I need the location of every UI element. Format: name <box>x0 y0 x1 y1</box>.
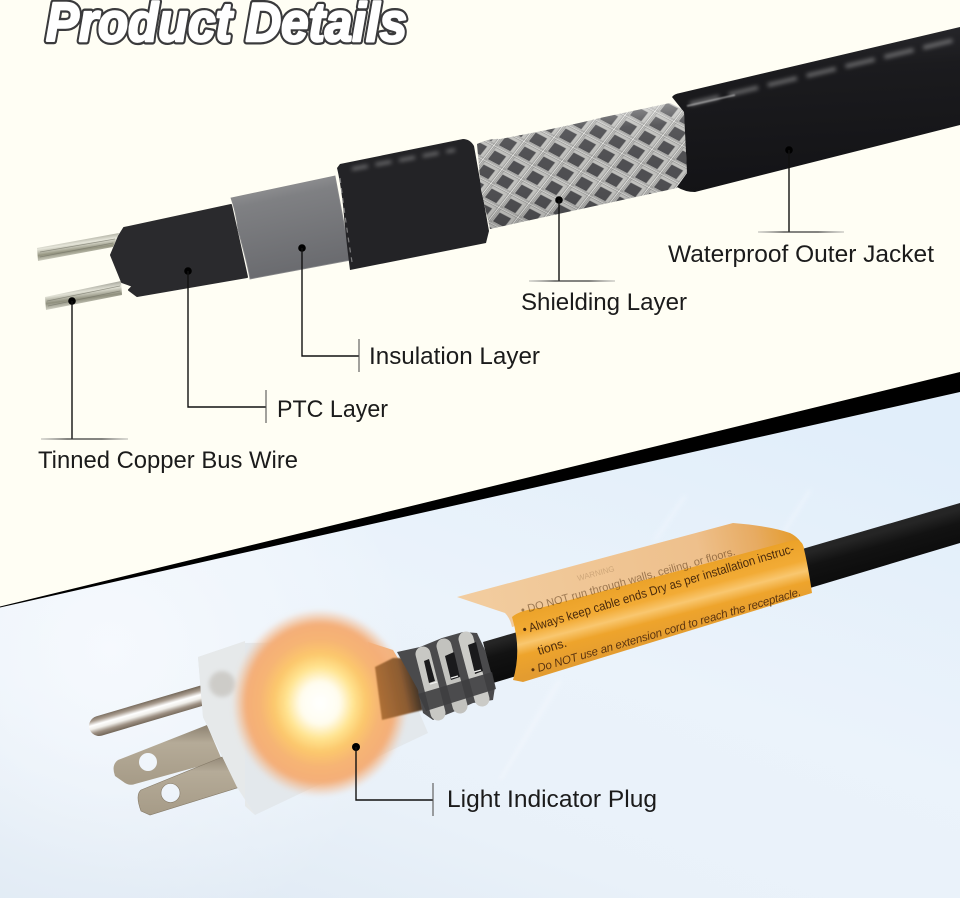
PTC layer core <box>111 205 247 296</box>
tag printed text: WARNING <box>576 564 616 583</box>
heating cable cutaway <box>37 27 960 310</box>
orange glow <box>232 609 408 797</box>
lower flat blade <box>138 753 240 815</box>
ground pin <box>99 692 214 726</box>
insulation layer <box>231 176 351 279</box>
inner jacket section <box>337 139 489 270</box>
tag printed text: • Always keep cable ends Dry as per installation instruc- <box>521 542 796 637</box>
label: PTC layer <box>184 267 388 423</box>
label: waterproof outer jacket <box>668 146 934 268</box>
power cable <box>483 503 960 683</box>
label: insulation layer: Insulation Layer <box>369 343 540 370</box>
warning tag <box>457 523 812 682</box>
lighted plug <box>99 609 496 815</box>
label: light indicator plug: Light Indicator Plug <box>447 786 657 813</box>
tinned copper wires <box>37 233 122 310</box>
peeled tag flap <box>457 523 804 627</box>
label: shielding layer: Shielding Layer <box>521 289 687 316</box>
label: tinned copper bus wire <box>38 297 298 474</box>
tag printed text: • DO NOT run through walls, ceiling, or floors. <box>520 546 737 617</box>
brown cable end inside plug <box>375 658 423 720</box>
label: PTC layer: PTC Layer <box>277 396 388 423</box>
label: waterproof outer jacket: Waterproof Outer Jacket <box>668 241 934 268</box>
upper flat blade <box>114 725 222 785</box>
label: tinned copper bus wire: Tinned Copper Bus Wire <box>38 447 298 474</box>
strain relief boot <box>397 632 496 720</box>
tag printed text: tions. <box>536 636 568 658</box>
label: insulation layer <box>298 244 540 372</box>
light blue lower panel <box>0 392 960 898</box>
label: shielding layer <box>521 196 687 316</box>
shielding braid <box>477 103 687 229</box>
label: light indicator plug <box>352 743 657 816</box>
tag wrapped around cable <box>512 540 812 682</box>
tag printed text: • Do NOT use an extension cord to reach the receptacle. <box>529 586 803 677</box>
black diagonal divider <box>0 372 960 608</box>
clear plug body <box>198 641 428 815</box>
waterproof outer jacket <box>672 27 960 192</box>
tag printed text <box>520 542 803 677</box>
